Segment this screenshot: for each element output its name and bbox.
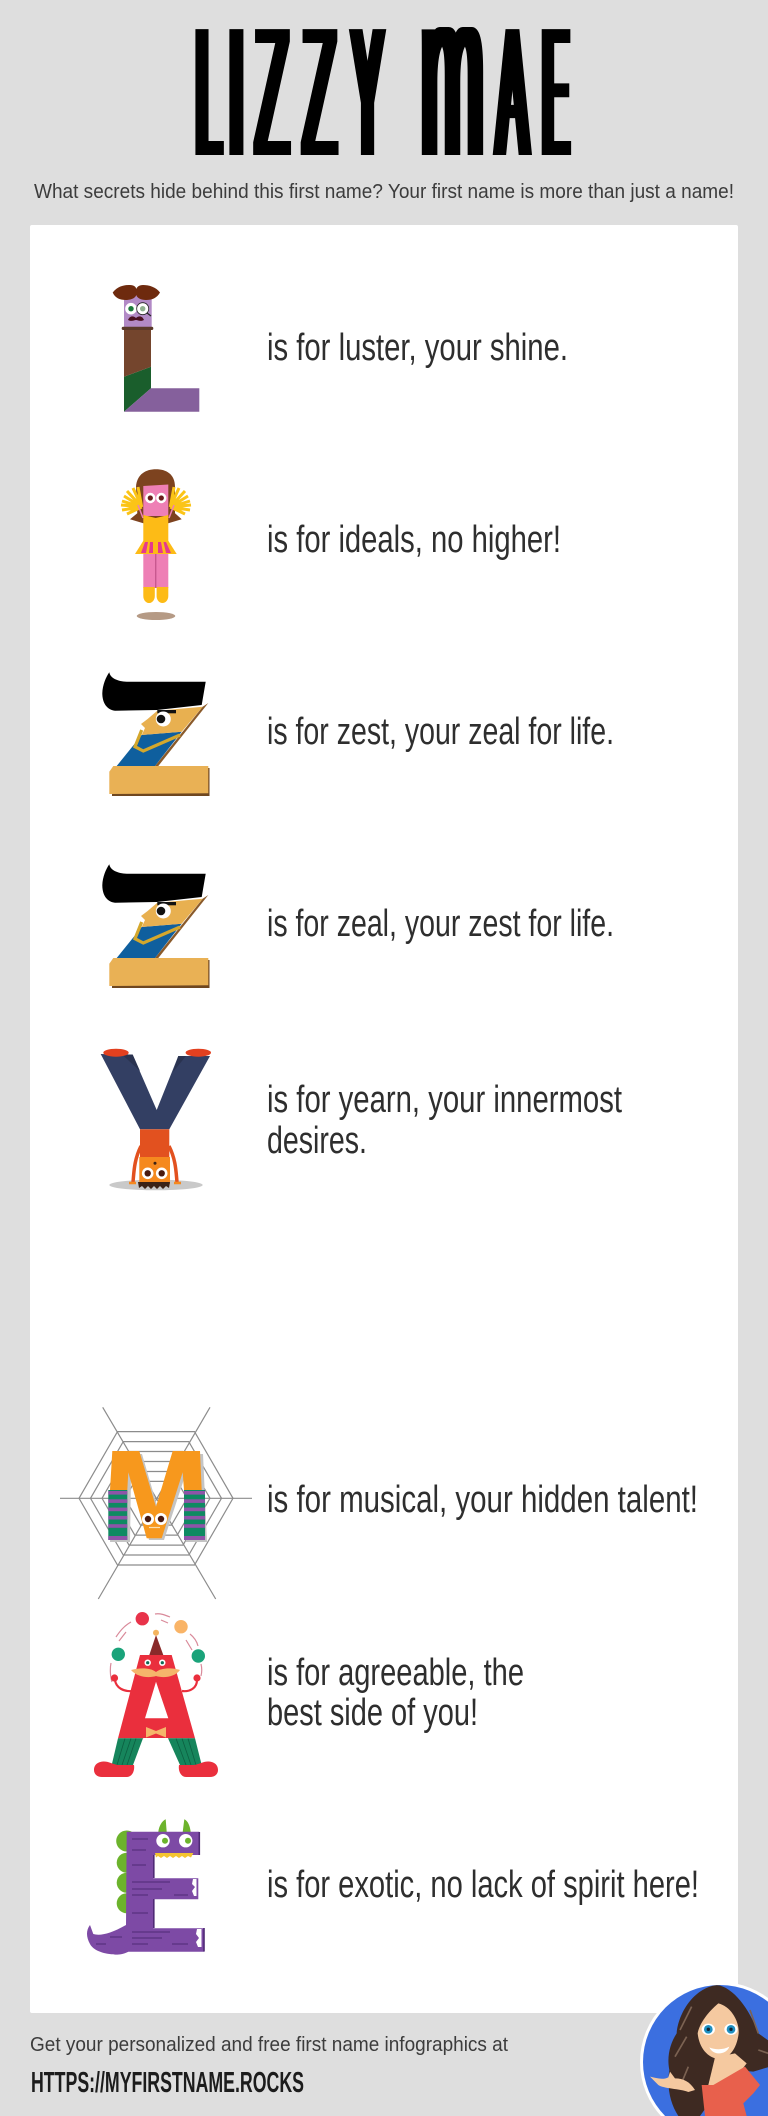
icon: letter E dragon character (87, 1819, 204, 1955)
text: Y: desires. (267, 1120, 367, 1162)
icon: avatar (640, 1982, 768, 2116)
icon: letter I character (121, 469, 191, 620)
text: A (267, 1652, 524, 1734)
icon: letter M character with web (60, 1407, 252, 1599)
icon: letter L character (113, 285, 199, 412)
text: Z zeal: is for zeal, your zest for life. (267, 903, 614, 945)
icon: letter Y character (101, 1049, 211, 1190)
footer text: Get your personalized and free first name infographics at (30, 2034, 508, 2056)
text: A: is for agreeable, the (267, 1652, 524, 1694)
panel: letters card (30, 225, 738, 2013)
icon: letter Z character (102, 672, 210, 796)
text: Y (267, 1079, 622, 1162)
icon: second letter Z character (102, 864, 210, 988)
title (196, 0, 568, 206)
icon: letter A juggling character (94, 1612, 218, 1777)
text: I: is for ideals, no higher! (267, 519, 561, 561)
text: Z zest: is for zest, your zeal for life. (267, 711, 614, 753)
text: L: is for luster, your shine. (267, 327, 568, 369)
footer url: HTTPS://MYFIRSTNAME.ROCKS (31, 2067, 304, 2099)
text: A: best side of you! (267, 1692, 478, 1734)
subtitle: What secrets hide behind this first name? Your first name is more than just a name! (34, 181, 734, 203)
text: Y: is for yearn, your innermost (267, 1079, 622, 1121)
